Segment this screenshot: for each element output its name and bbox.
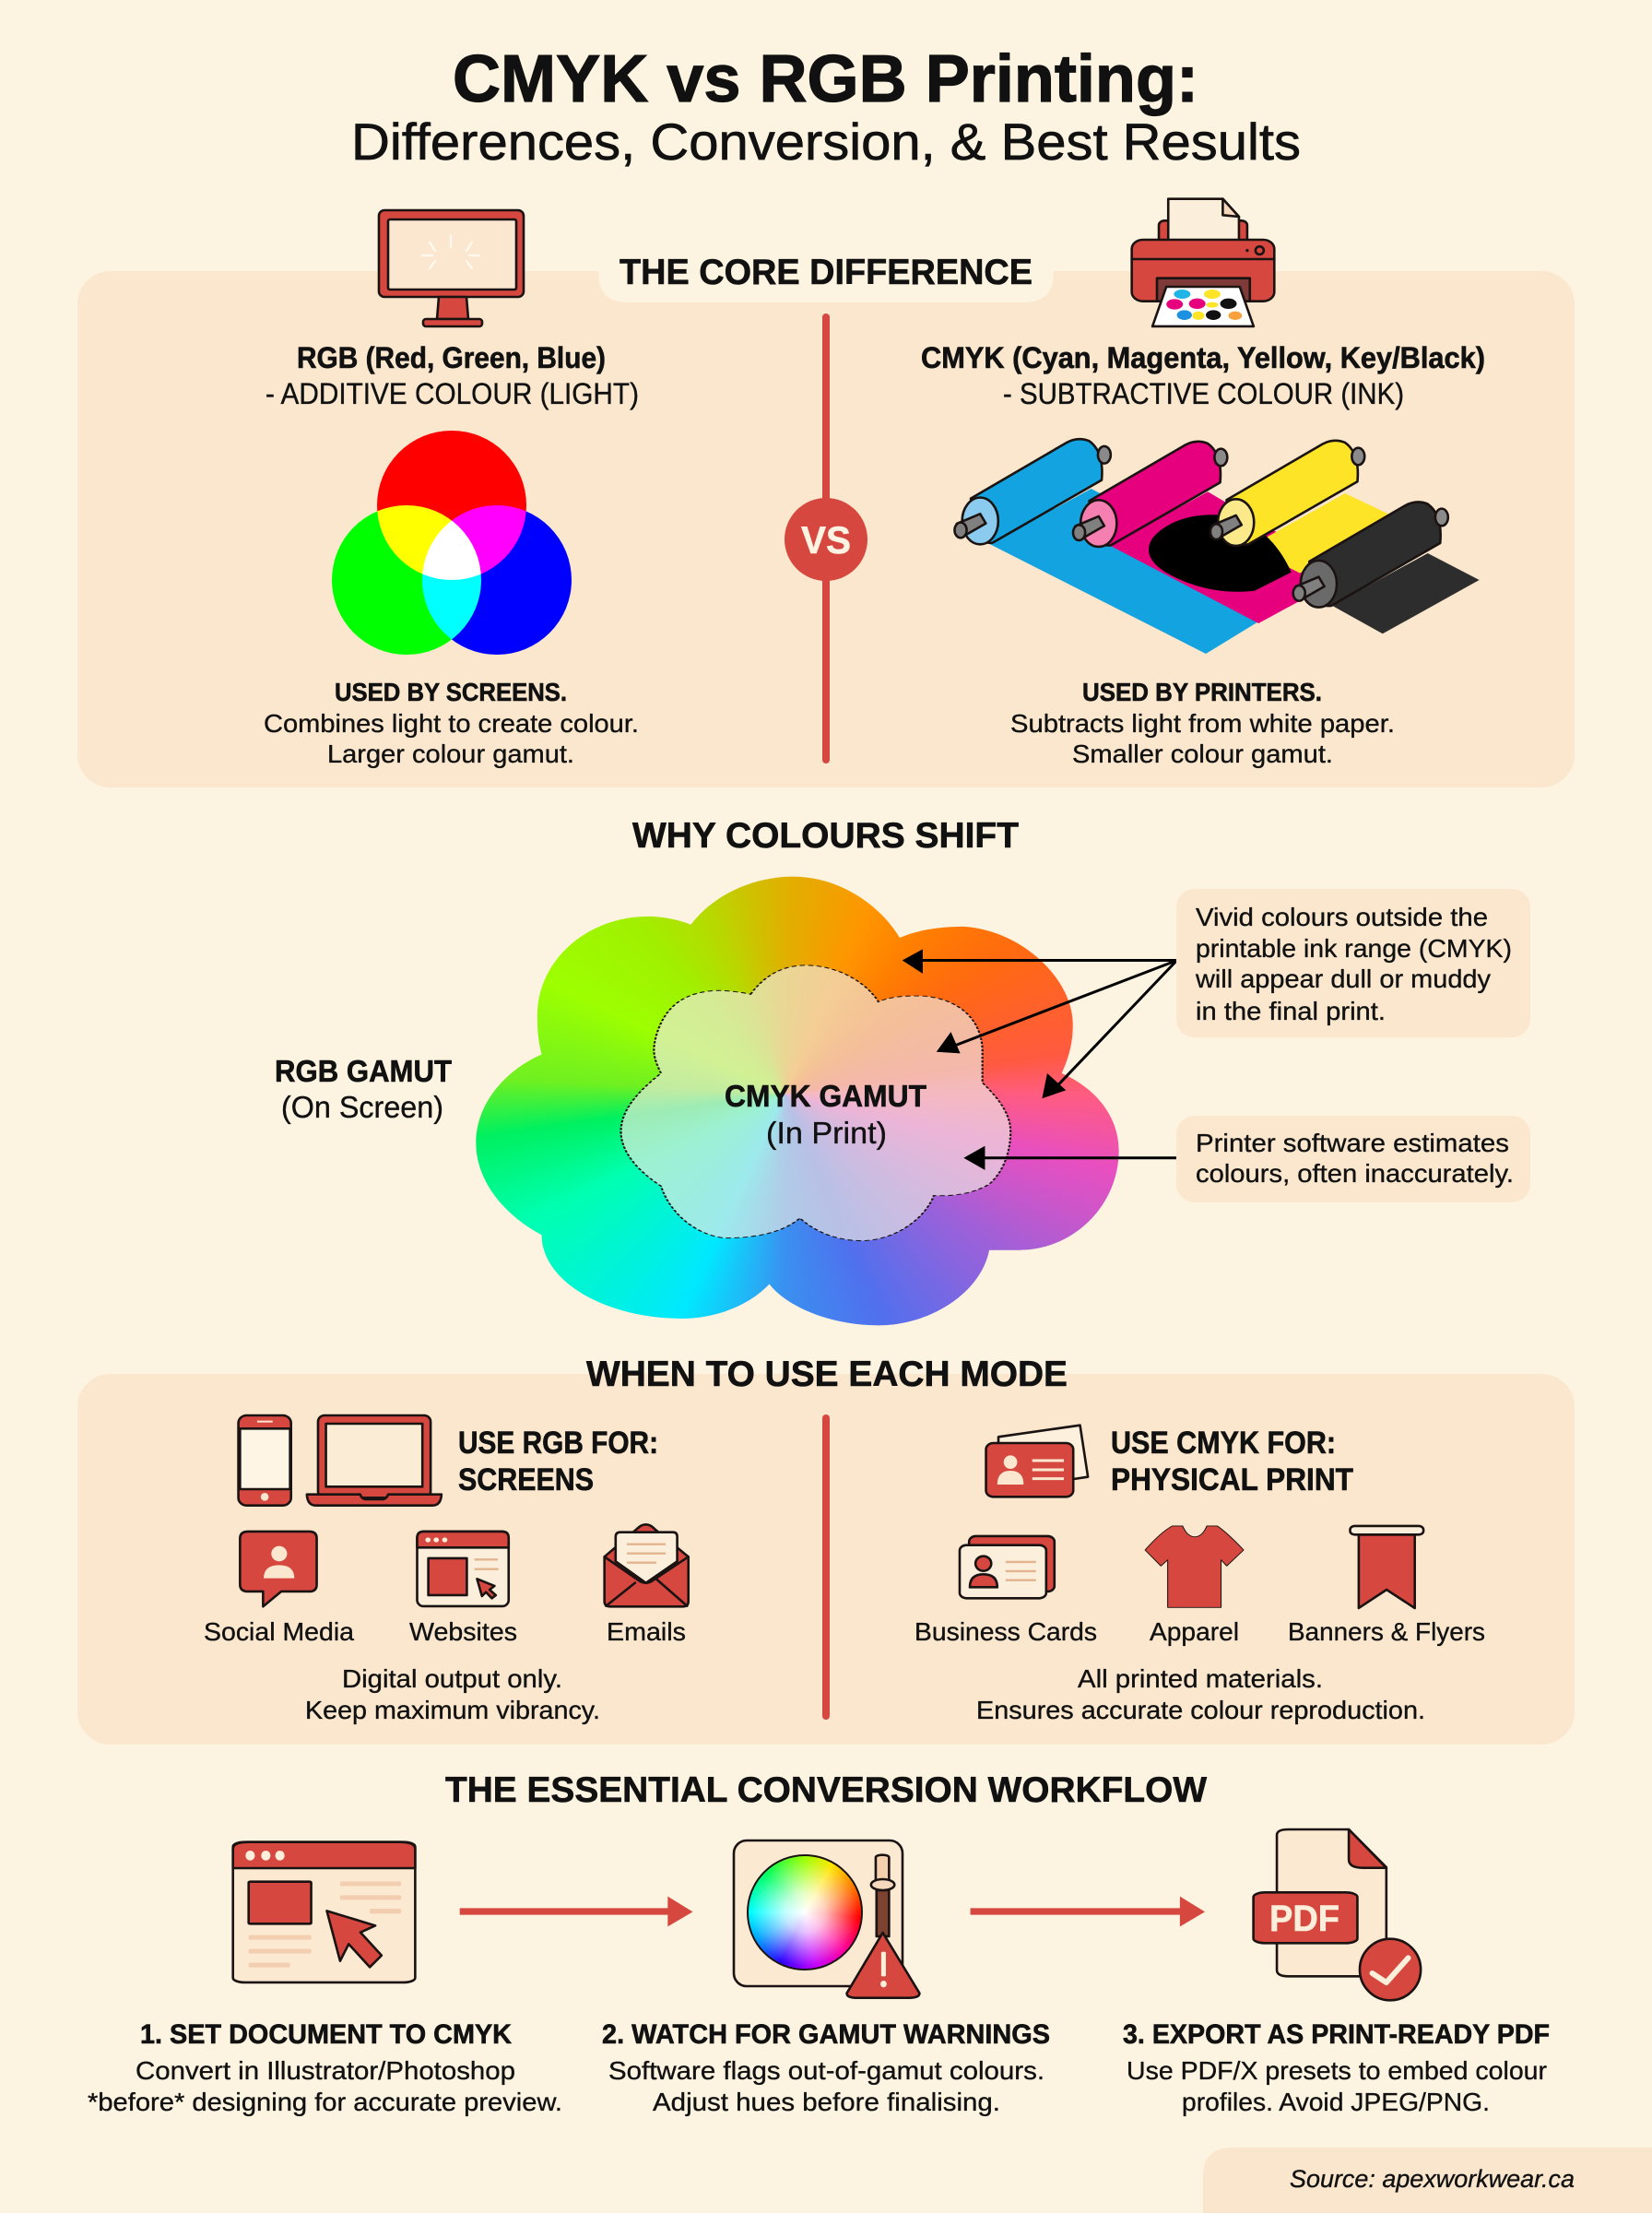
icon: PDF document: [1254, 1829, 1421, 2000]
icon: monitor: [379, 210, 524, 326]
text: digital output: Keep maximum vibrancy.: [305, 1696, 600, 1724]
title: CMYK vs RGB Printing:: [453, 42, 1198, 116]
text: all printed materials: [976, 1664, 1425, 1724]
text: RGB used by screens: USED BY SCREENS.: [335, 678, 567, 706]
text: all printed materials: All printed materials.: [1078, 1664, 1323, 1693]
icon: social media bubble: [240, 1532, 317, 1606]
roller: cyan: [954, 439, 1111, 544]
callout: vivid colours: in the final print.: [1196, 997, 1386, 1025]
CMYK gamut label: CMYK GAMUT: [725, 1079, 926, 1113]
label: business cards: Business Cards: [914, 1617, 1097, 1646]
callout arrows: [903, 949, 1177, 1170]
slider and warning triangle: [847, 1855, 919, 1998]
callout: vivid colours: printable ink range (CMYK): [1196, 934, 1512, 963]
icon: banner: [1351, 1526, 1423, 1608]
source tag: Source: apexworkwear.ca: [1290, 2165, 1575, 2193]
text: use RGB for screens: USE RGB FOR:: [458, 1426, 658, 1461]
panel: when to use each mode: [77, 1355, 1575, 1745]
label: apparel: Apparel: [1150, 1617, 1239, 1646]
text: step 1: 1. SET DOCUMENT TO CMYK: [140, 2019, 512, 2050]
workflow step 2: [602, 1840, 1050, 2116]
text: use CMYK for physical print: [1111, 1426, 1353, 1497]
text: step 1: Convert in Illustrator/Photoshop: [136, 2056, 515, 2085]
inner CMYK gamut cloud: [621, 965, 1010, 1241]
callout: vivid colours: will appear dull or muddy: [1195, 964, 1491, 993]
text: step 2: Adjust hues before finalising.: [653, 2088, 1000, 2116]
icon: website window: [417, 1532, 509, 1606]
icons: phone and laptop: [239, 1415, 442, 1506]
text: step 2: [602, 2019, 1050, 2116]
chart: gamut cloud diagram: [275, 858, 1530, 1337]
panel: the core difference: [77, 199, 1575, 787]
CMYK heading: CMYK (Cyan, Magenta, Yellow, Key/Black): [921, 341, 1485, 374]
roller: black: [1293, 502, 1448, 608]
RGB heading: - ADDITIVE COLOUR (LIGHT): [266, 377, 639, 410]
text: step 3: [1123, 2019, 1550, 2116]
callout: printer software: colours, often inaccurately.: [1196, 1159, 1514, 1188]
text: use RGB for screens: [458, 1426, 658, 1497]
heading: when to use each mode: WHEN TO USE EACH MODE: [586, 1355, 1068, 1394]
divider: [822, 1414, 830, 1720]
icon: document window: [233, 1842, 415, 1982]
text: digital output: Digital output only.: [342, 1664, 562, 1693]
icon: printer: [1132, 199, 1274, 326]
text: digital output: [305, 1664, 600, 1724]
icon: business cards: [960, 1536, 1055, 1598]
illustration: CMYK ink rollers: [954, 439, 1480, 654]
roller: magenta: [1073, 442, 1227, 547]
icon: print cards: [986, 1426, 1088, 1497]
CMYK gamut label: (In Print): [766, 1116, 887, 1150]
heading tab: the core difference: THE CORE DIFFERENCE: [620, 253, 1032, 292]
icon: email envelope: [605, 1524, 689, 1606]
text: CMYK used by printers: [1010, 678, 1395, 768]
callout: printer software: [1176, 1116, 1530, 1202]
workflow step 3: [1123, 1829, 1550, 2116]
text: RGB used by screens: [264, 678, 639, 768]
callout: vivid colours: Vivid colours outside the: [1196, 903, 1488, 931]
text: step 1: [88, 2019, 562, 2116]
text: CMYK used by printers: USED BY PRINTERS.: [1082, 678, 1322, 706]
heading: conversion workflow: THE ESSENTIAL CONVERSION WORKFLOW: [445, 1770, 1207, 1810]
workflow step 1: [88, 1842, 562, 2116]
text: RGB used by screens: Larger colour gamut.: [327, 740, 574, 768]
chart: additive RGB venn: [332, 431, 572, 655]
title: [351, 42, 1301, 171]
source tag: [1203, 2148, 1652, 2213]
text: step 3: 3. EXPORT AS PRINT-READY PDF: [1123, 2019, 1550, 2050]
text: CMYK used by printers: Smaller colour gamut.: [1072, 740, 1333, 768]
CMYK heading: - SUBTRACTIVE COLOUR (INK): [1003, 377, 1404, 410]
divider with VS badge: [785, 314, 867, 763]
RGB gamut label: RGB GAMUT: [275, 1054, 452, 1088]
outer RGB gamut cloud: [476, 876, 1119, 1326]
divider with VS badge: VS: [801, 518, 851, 562]
RGB gamut label: [275, 1054, 452, 1124]
RGB heading: RGB (Red, Green, Blue): [297, 341, 606, 374]
label: banners and flyers: Banners & Flyers: [1288, 1617, 1485, 1646]
text: step 3: Use PDF/X presets to embed colour: [1127, 2056, 1547, 2085]
arrow: step 2 to step 3: [971, 1897, 1205, 1926]
icon: colour wheel with warning: [734, 1840, 919, 1998]
RGB heading: [266, 341, 639, 410]
roller: yellow: [1210, 441, 1364, 546]
text: CMYK used by printers: Subtracts light from white paper.: [1010, 709, 1395, 738]
text: use CMYK for physical print: USE CMYK FOR:: [1111, 1426, 1336, 1461]
CMYK gamut label: [725, 1079, 926, 1150]
callout: printer software: Printer software estimates: [1196, 1129, 1509, 1157]
text: RGB used by screens: Combines light to create colour.: [264, 709, 639, 738]
colour wheel: [747, 1854, 863, 1970]
text: step 3: profiles. Avoid JPEG/PNG.: [1182, 2088, 1490, 2116]
label: websites: Websites: [409, 1617, 517, 1646]
text: use CMYK for physical print: PHYSICAL PRINT: [1111, 1462, 1353, 1497]
title: Differences, Conversion, & Best Results: [351, 112, 1301, 171]
text: step 1: *before* designing for accurate preview.: [88, 2088, 562, 2116]
text: step 2: Software flags out-of-gamut colours.: [608, 2056, 1044, 2085]
icon: PDF document: PDF: [1269, 1899, 1339, 1939]
callout: vivid colours: [1176, 889, 1530, 1037]
heading: why colours shift: WHY COLOURS SHIFT: [632, 816, 1019, 856]
label: emails: Emails: [607, 1617, 686, 1646]
text: use RGB for screens: SCREENS: [458, 1462, 594, 1497]
RGB gamut label: (On Screen): [281, 1090, 443, 1124]
label: social media: Social Media: [204, 1617, 354, 1646]
arrow: step 1 to step 2: [460, 1897, 692, 1926]
text: step 2: 2. WATCH FOR GAMUT WARNINGS: [602, 2019, 1050, 2050]
icon: t-shirt: [1145, 1526, 1244, 1607]
text: all printed materials: Ensures accurate colour reproduction.: [976, 1696, 1425, 1724]
CMYK heading: [921, 341, 1485, 410]
